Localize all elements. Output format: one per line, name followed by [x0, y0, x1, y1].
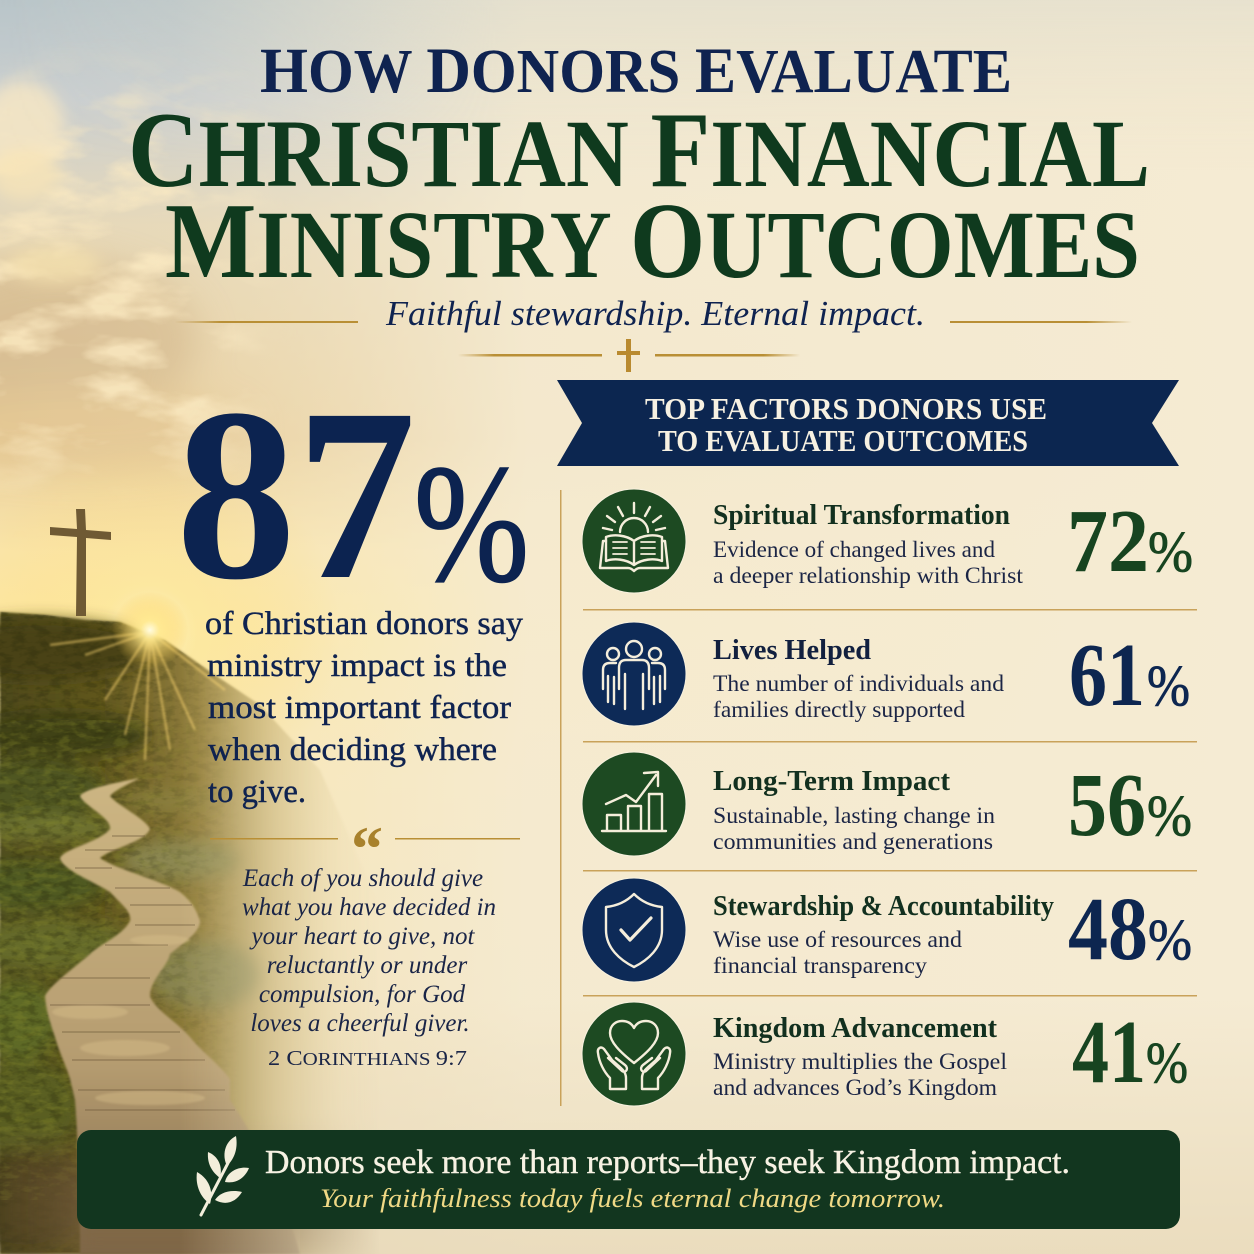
- tagline: Faithful stewardship. Eternal impact.: [385, 294, 925, 333]
- footer message: Donors seek more than reports–they seek Kingdom impact.: [265, 1144, 1070, 1181]
- stat: 87 percent: %: [414, 431, 529, 617]
- scripture quote: [242, 865, 496, 1037]
- title: [128, 35, 1150, 301]
- factor value: 61 percent: %: [1147, 653, 1190, 718]
- factor description: Wise use of resources and: [713, 927, 963, 952]
- factor description: [713, 537, 1024, 588]
- title line: christian financial: CHRISTIAN FINANCIAL: [128, 91, 1150, 210]
- stat description: most important factor: [208, 690, 511, 726]
- factor description: The number of individuals and: [713, 671, 1005, 696]
- icon: shield with check: [582, 878, 686, 982]
- factor value: 41 percent: %: [1146, 1030, 1188, 1095]
- factor heading: Kingdom Advancement: [713, 1013, 998, 1044]
- factor value: 72 percent: %: [1148, 519, 1193, 584]
- icon: three people: [582, 622, 686, 726]
- scripture quote: your heart to give, not: [249, 923, 475, 950]
- banner: top factors: [557, 380, 1179, 466]
- factor description: financial transparency: [713, 953, 928, 978]
- factor: spiritual transformation: [582, 489, 1193, 593]
- icon: heart in hands: [582, 1002, 686, 1106]
- factor heading: Long-Term Impact: [713, 766, 951, 797]
- factor value: 61 percent: 61: [1069, 626, 1145, 725]
- banner: top factors: TOP FACTORS DONORS USE: [645, 391, 1047, 426]
- factor description: a deeper relationship with Christ: [713, 563, 1024, 588]
- factor description: communities and generations: [713, 829, 993, 854]
- factor value: 56 percent: 56: [1068, 756, 1146, 855]
- footer tagline: Your faithfulness today fuels eternal change tomorrow.: [320, 1184, 945, 1213]
- scripture reference: 2 C ORINTHIANS 9:7: [268, 1046, 467, 1070]
- factor description: Evidence of changed lives and: [713, 537, 995, 562]
- scripture quote: what you have decided in: [242, 894, 496, 921]
- factor value: 41 percent: 41: [1072, 1003, 1146, 1102]
- scripture quote: compulsion, for God: [259, 981, 466, 1008]
- scripture quote: loves a cheerful giver.: [250, 1010, 470, 1037]
- factor: long-term impact: [582, 752, 1192, 856]
- icon: open book and sunrise: [582, 489, 686, 593]
- factor value: 72 percent: 72: [1067, 492, 1149, 591]
- factor description: Ministry multiplies the Gospel: [713, 1049, 1007, 1074]
- stat description: of Christian donors say: [205, 606, 524, 642]
- factor heading: Spiritual Transformation: [713, 500, 1010, 531]
- stat description: ministry impact is the: [207, 648, 507, 684]
- title line: how donors evaluate: HOW DONORS EVALUATE: [260, 35, 1012, 107]
- factor description: [713, 927, 963, 978]
- stat description: [205, 606, 524, 810]
- factor description: and advances God’s Kingdom: [713, 1075, 997, 1100]
- factor value: 48 percent: 48: [1068, 880, 1148, 979]
- icon: growth chart: [582, 752, 686, 856]
- stat: 87 percent: 87: [176, 359, 416, 631]
- factor description: [713, 803, 996, 854]
- icon: cross on hill: [50, 509, 111, 616]
- factor: kingdom advancement: [582, 1002, 1188, 1106]
- scripture quote: Each of you should give: [242, 865, 483, 892]
- factor: lives helped: [582, 622, 1190, 726]
- factor: stewardship and accountability: [582, 878, 1192, 982]
- factor description: Sustainable, lasting change in: [713, 803, 996, 828]
- factor value: 56 percent: %: [1147, 783, 1192, 848]
- factor heading: Lives Helped: [713, 635, 871, 666]
- stat description: when deciding where: [208, 732, 497, 768]
- banner: top factors: TO EVALUATE OUTCOMES: [658, 423, 1028, 458]
- factor list dividers: [560, 490, 1197, 1106]
- title line: ministry outcomes: MINISTRY OUTCOMES: [165, 182, 1140, 301]
- divider with small cross: [458, 339, 800, 372]
- stat: 87 percent: [176, 359, 529, 631]
- factor description: families directly supported: [713, 697, 966, 722]
- factor heading: Stewardship & Accountability: [713, 891, 1054, 922]
- stat description: to give.: [208, 774, 306, 810]
- quote divider: “: [351, 813, 383, 884]
- scripture quote: reluctantly or under: [267, 952, 467, 979]
- icon: hillside and path photo: [0, 595, 368, 1254]
- factor description: [713, 1049, 1007, 1100]
- footer banner: [77, 1130, 1180, 1229]
- factor value: 48 percent: %: [1148, 907, 1192, 972]
- icon: olive branch: [197, 1136, 249, 1215]
- factor description: [713, 671, 1005, 722]
